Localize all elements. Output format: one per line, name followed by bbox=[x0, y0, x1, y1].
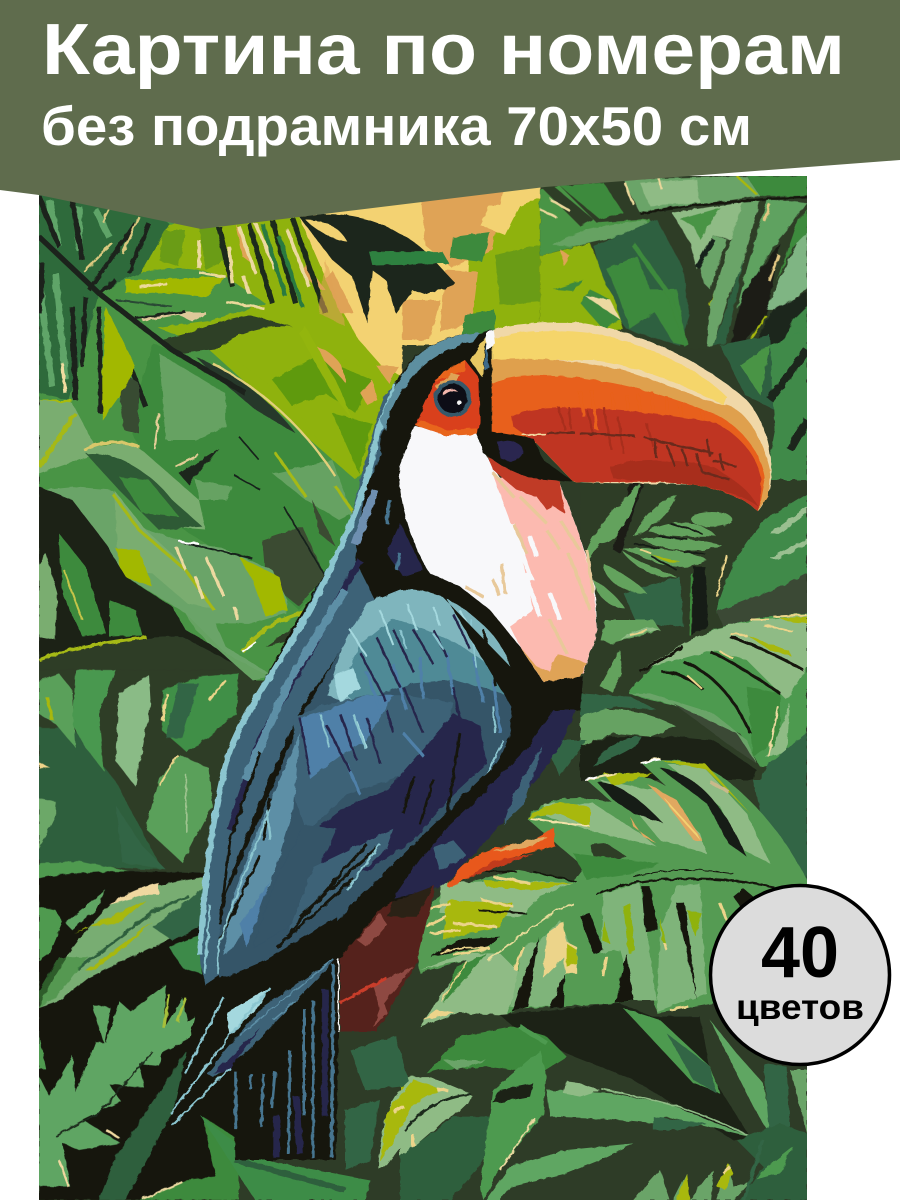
foliage: top right region bbox=[540, 176, 807, 349]
foliage: top centre canopy bbox=[402, 188, 542, 346]
lower leaf tones bbox=[420, 953, 520, 1027]
foliage: lower centre bbox=[200, 1035, 410, 1200]
big green leaf bbox=[129, 343, 350, 610]
toucan body bbox=[170, 332, 580, 1160]
face bbox=[415, 360, 480, 436]
fern bbox=[39, 984, 196, 1188]
yellow-green leaf bbox=[378, 1077, 473, 1169]
foliage: monstera lower right bbox=[400, 740, 807, 1200]
dark gaps between fingers bbox=[597, 768, 747, 857]
throat white bbox=[399, 426, 597, 682]
upper left palm fan bbox=[39, 193, 169, 400]
tail feathers bbox=[232, 960, 338, 1112]
toucan head and beak bbox=[380, 322, 771, 710]
badge: 40 colours: 40 bbox=[761, 913, 839, 993]
foliage: lower left region bbox=[39, 670, 239, 1200]
wing bbox=[217, 589, 512, 978]
foliage: fern and fan leaf right bbox=[580, 480, 807, 780]
dark undergrowth bbox=[39, 487, 256, 680]
throat pink bbox=[493, 477, 597, 682]
frond rachis bbox=[156, 315, 292, 353]
lower leaves bbox=[623, 1008, 720, 1093]
slits bbox=[430, 887, 753, 1012]
foliage: top left region bbox=[39, 180, 456, 680]
beak base black bbox=[477, 343, 573, 482]
pale lower leaf bbox=[39, 400, 206, 530]
panel: toucan painting bbox=[39, 176, 807, 1200]
neck feathers bbox=[200, 382, 396, 985]
eye bbox=[434, 380, 471, 417]
midrib bbox=[487, 903, 573, 960]
beak bbox=[493, 322, 771, 512]
header banner bbox=[0, 0, 900, 229]
badge: 40 colours: цветов bbox=[736, 988, 864, 1027]
lower shadow bbox=[500, 1003, 750, 1140]
top right frond bbox=[299, 214, 456, 323]
foliage: right of beak bbox=[720, 331, 807, 481]
subtitle: без подрамника 70х50 см bbox=[41, 95, 752, 157]
foot bbox=[447, 827, 555, 888]
badge: 40 colours bbox=[710, 886, 890, 1064]
stem bbox=[98, 1052, 187, 1200]
black undergrowth bbox=[39, 871, 239, 1200]
gullet red bbox=[487, 455, 565, 513]
title: Картина по номерам bbox=[42, 10, 845, 90]
top centre palm bbox=[199, 218, 326, 313]
under-tail red bbox=[340, 886, 435, 1032]
horizontal leaf bbox=[102, 268, 266, 330]
back/belly bbox=[393, 695, 580, 898]
main rachis over fronds bbox=[39, 237, 246, 393]
bright leaf bbox=[39, 487, 287, 680]
wing tips and tail bbox=[170, 917, 337, 1139]
pale leaf bbox=[39, 878, 204, 1008]
fan leaf bbox=[628, 613, 807, 767]
head black bbox=[380, 330, 583, 710]
body silhouette bbox=[174, 334, 538, 1161]
main leaf bbox=[417, 760, 807, 1027]
